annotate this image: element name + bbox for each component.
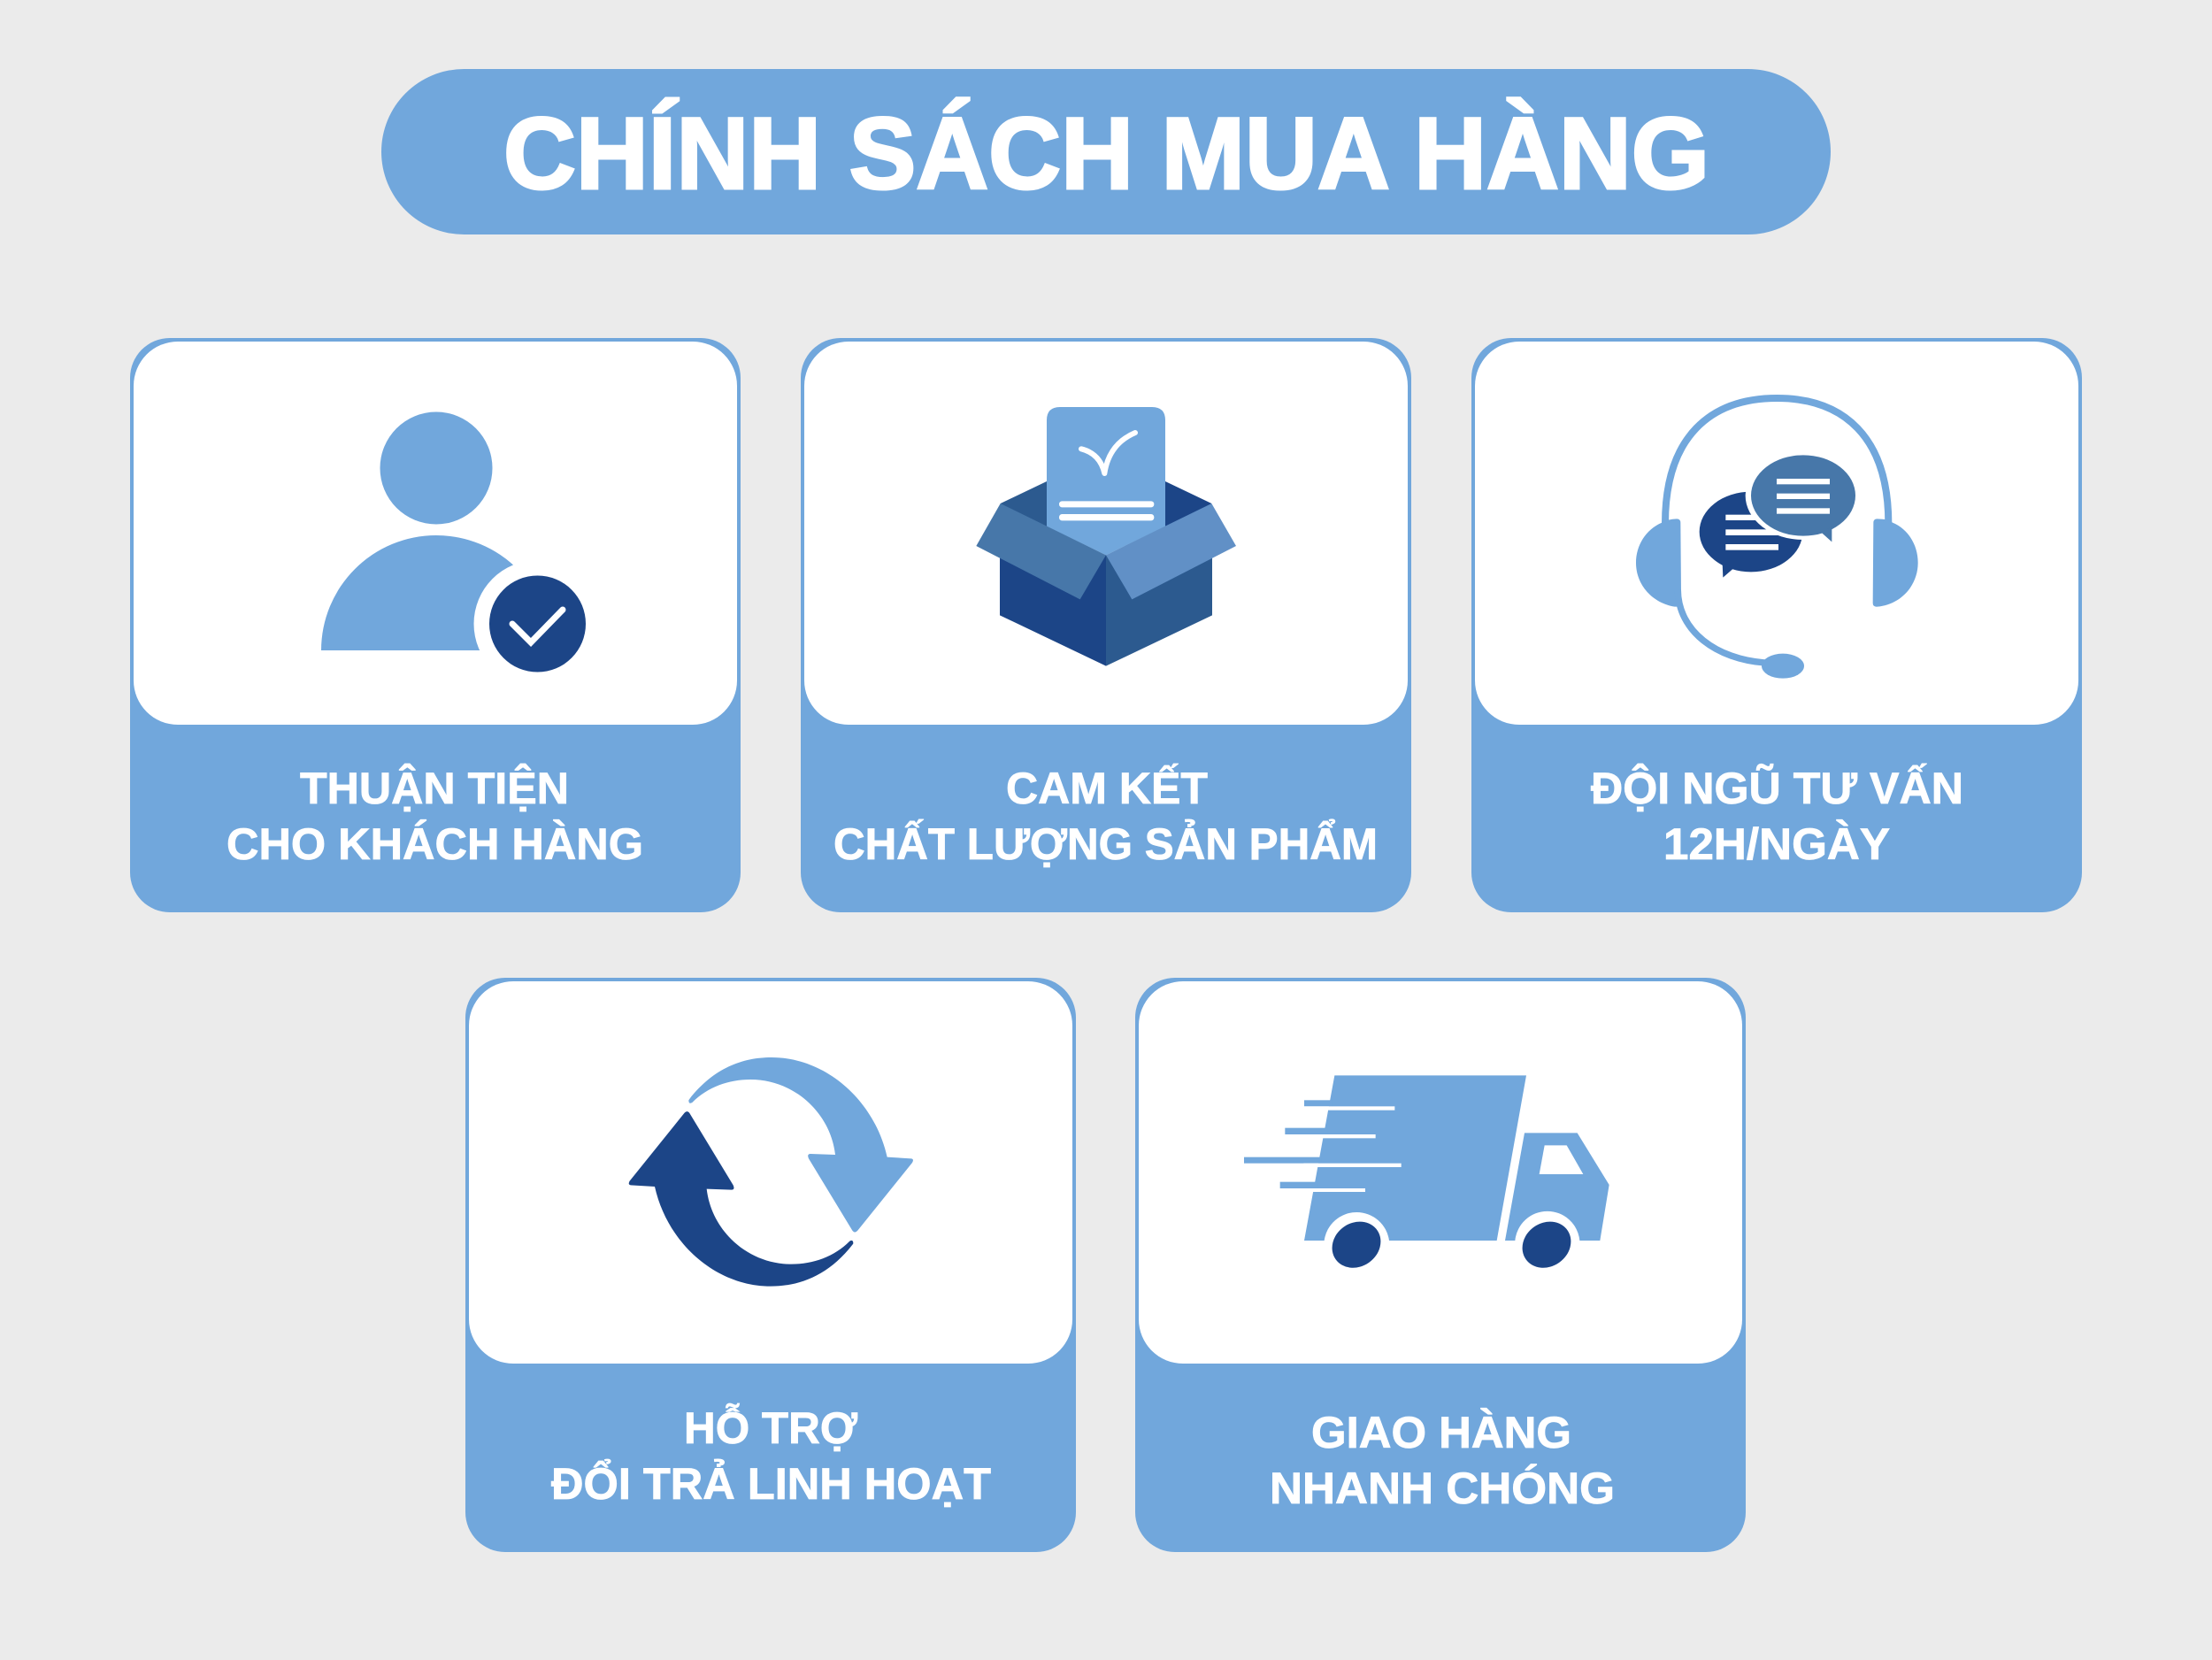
label: hỗ trợ: HỖ TRỢ [684,1403,857,1453]
label: đổi trả linh hoạt: ĐỔI TRẢ LINH HOẠT [551,1458,991,1509]
icon: customer with check badge [314,412,602,688]
label: cho khách hàng: CHO KHÁCH HÀNG [227,819,643,869]
panel: thuận tiện cho khách hàng [130,338,741,912]
title: CHÍNH SÁCH MUA HÀNG [503,97,1709,211]
panel: giao hàng nhanh chóng [1135,978,1746,1552]
panel: hỗ trợ đổi trả linh hoạt [465,978,1076,1552]
label: cam kết: CAM KẾT [1006,764,1208,813]
icon: open box with document [976,407,1236,666]
label: thuận tiện: THUẬN TIỆN [300,764,569,813]
label: 12h/ngày: 12H/NGÀY [1663,819,1890,869]
title [381,69,1831,234]
panel: đội ngũ tư vấn [1471,338,2082,912]
label: giao hàng: GIAO HÀNG [1311,1408,1571,1457]
icon: headset with chat bubbles [1636,398,1918,679]
label: nhanh chóng: NHANH CHÓNG [1270,1464,1615,1513]
label: chất lượng sản phẩm: CHẤT LƯỢNG SẢN PHẨM [833,819,1378,869]
icon: delivery truck [1244,1075,1609,1277]
label: đội ngũ tư vấn: ĐỘI NGŨ TƯ VẤN [1591,763,1963,813]
icon: circular return arrows [629,1057,913,1287]
panel: cam kết chất lượng sản phẩm [801,338,1411,912]
